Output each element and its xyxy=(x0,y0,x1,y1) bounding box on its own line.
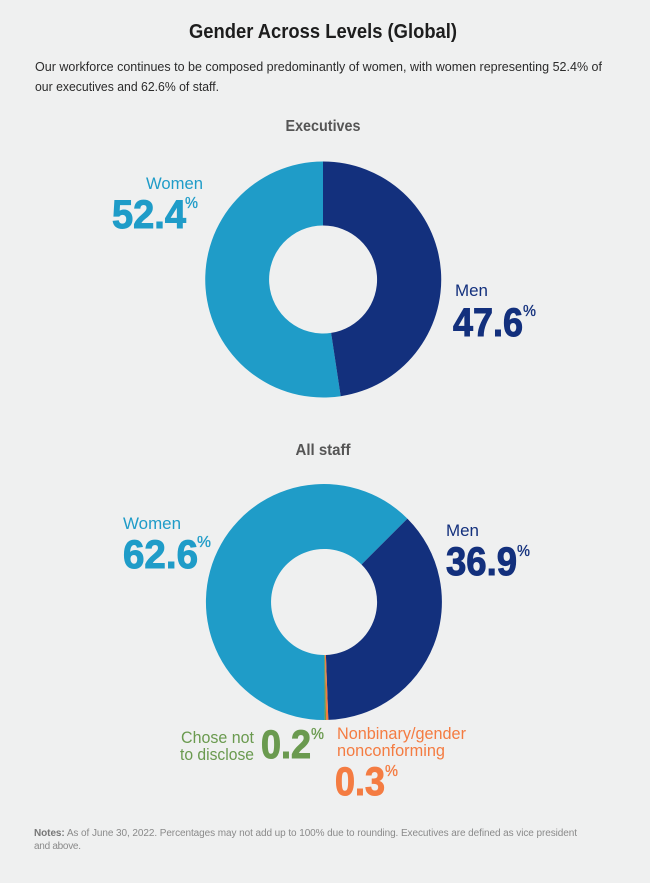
intro text xyxy=(35,60,603,94)
label: executives women: % xyxy=(185,195,198,212)
label: executives women: Women xyxy=(146,174,203,193)
segment: executives men xyxy=(323,161,441,396)
footnote: and above. xyxy=(34,841,81,852)
heading: all staff: All staff xyxy=(296,442,351,459)
label: chose not to disclose: 0.2 xyxy=(261,723,311,767)
intro text: Our workforce continues to be composed predominantly of women, with women representing 52.4% of xyxy=(35,60,603,74)
donut chart: all staff xyxy=(206,484,442,720)
segment: all staff undisclosed xyxy=(324,655,326,720)
label: executives men: % xyxy=(523,303,536,320)
label: executives men: Men xyxy=(455,281,488,300)
label: nonbinary/gender nonconforming xyxy=(335,724,466,804)
segment: all staff nonbinary xyxy=(325,655,328,720)
segment: executives women xyxy=(205,162,341,397)
label: chose not to disclose: % xyxy=(311,726,324,743)
label: nonbinary/gender nonconforming: nonconforming xyxy=(337,741,445,760)
segment: all staff women xyxy=(206,484,407,720)
label: all staff women: 62.6 xyxy=(123,533,198,577)
label: chose not to disclose: to disclose xyxy=(180,745,254,764)
label: all staff men: % xyxy=(517,543,530,560)
label: executives women xyxy=(112,174,203,237)
label: all staff men: 36.9 xyxy=(446,540,517,584)
intro text: our executives and 62.6% of staff. xyxy=(35,80,219,94)
label: executives men xyxy=(453,281,536,345)
label: executives women: 52.4 xyxy=(112,193,187,237)
footnote: Notes: As of June 30, 2022. Percentages may not add up to 100% due to rounding. Executives are defined as vice president xyxy=(34,828,577,839)
label: all staff men xyxy=(446,521,530,584)
heading: executives: Executives xyxy=(286,118,360,135)
footnote xyxy=(34,828,577,852)
label: nonbinary/gender nonconforming: Nonbinary/gender xyxy=(337,724,466,743)
label: all staff men: Men xyxy=(446,521,479,540)
label: nonbinary/gender nonconforming: 0.3 xyxy=(335,760,385,804)
donut chart: executives xyxy=(205,161,441,397)
title: Gender Across Levels (Global) xyxy=(189,21,457,43)
label: all staff women: % xyxy=(197,534,211,551)
label: all staff women xyxy=(123,514,211,577)
label: chose not to disclose: Chose not xyxy=(181,728,254,747)
segment: all staff men xyxy=(326,519,442,720)
label: executives men: 47.6 xyxy=(453,301,523,345)
label: all staff women: Women xyxy=(123,514,181,533)
label: chose not to disclose xyxy=(180,723,324,767)
label: nonbinary/gender nonconforming: % xyxy=(385,763,398,780)
